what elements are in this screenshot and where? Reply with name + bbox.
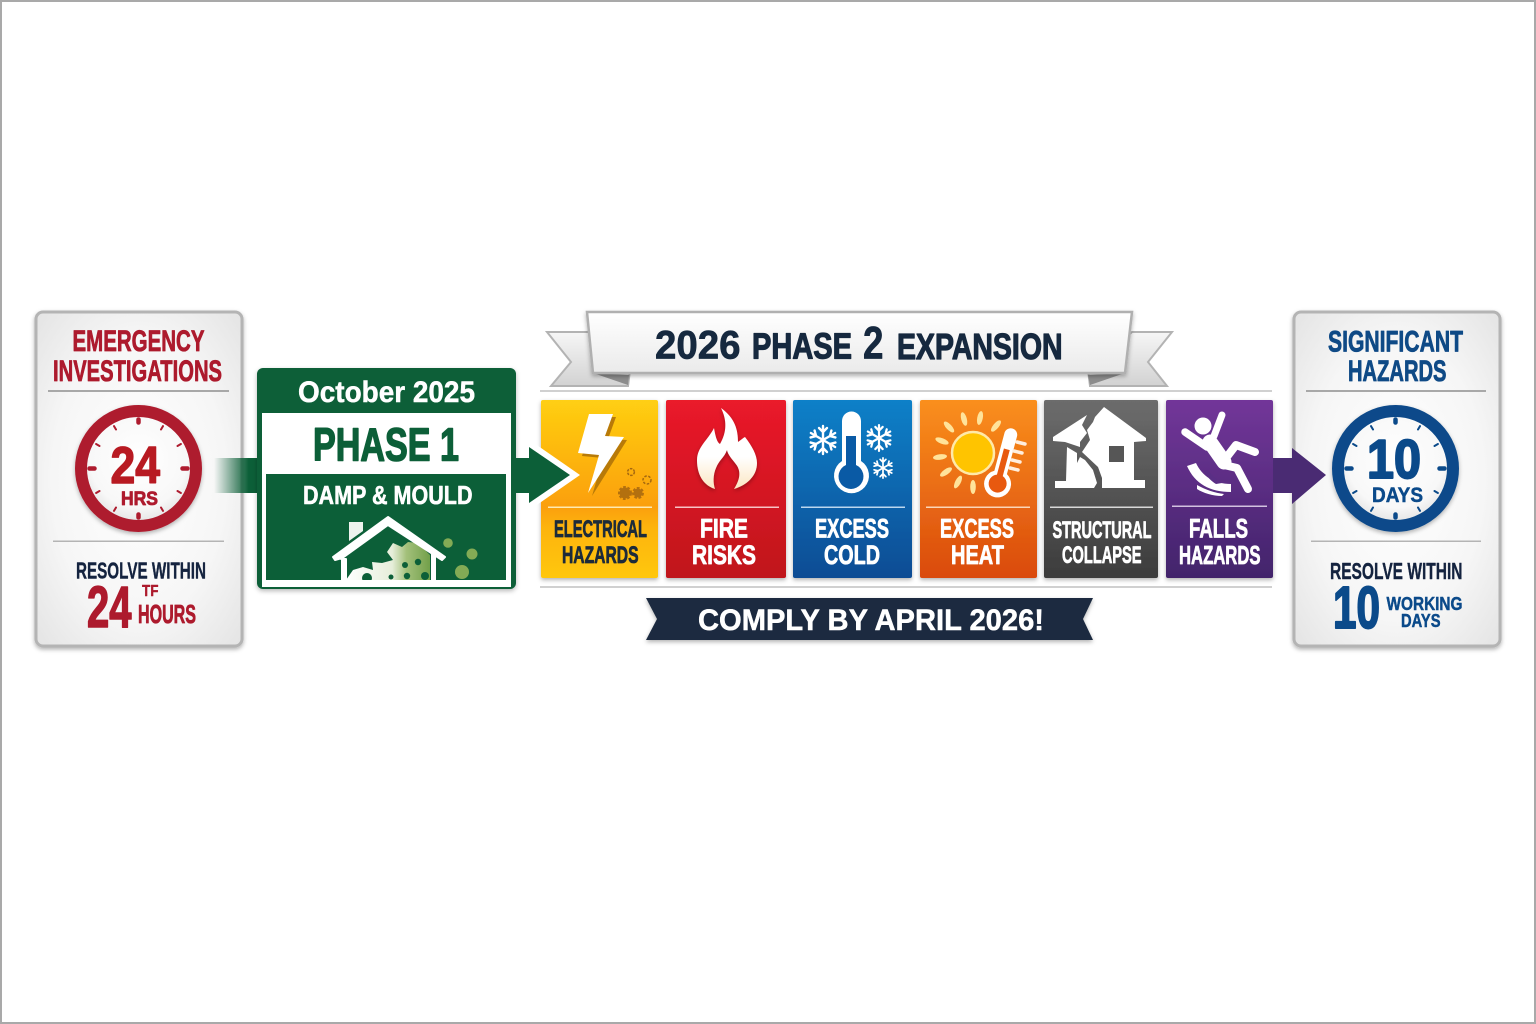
icon: falling person [1185, 415, 1255, 496]
label [692, 514, 756, 570]
icon: 10 days clock: DAYS [1372, 484, 1423, 507]
icon: cracked house [1053, 407, 1146, 488]
label: EXCESS [940, 514, 1014, 544]
text: damp and mould: DAMP & MOULD [303, 480, 472, 510]
label [940, 514, 1014, 570]
label [1179, 514, 1260, 570]
text: October 2025: October 2025 [298, 376, 475, 409]
icon: 24 hours clock [81, 411, 196, 526]
text: resolve within 24 hours [76, 558, 206, 640]
text: resolve within 10 working days: DAYS [1401, 611, 1440, 631]
panel: structural collapse [1044, 400, 1158, 578]
panel: excess cold [793, 400, 912, 578]
panel: significant hazards [1294, 312, 1500, 646]
heading: significant hazards: SIGNIFICANT [1328, 326, 1463, 358]
label: COLD [824, 540, 880, 570]
heading: emergency investigations: INVESTIGATIONS [53, 355, 222, 388]
heading: phase 1: PHASE 1 [313, 418, 459, 470]
callout: comply by april 2026: COMPLY BY APRIL 2026! [698, 604, 1044, 637]
panel: phase 1 damp and mould [257, 368, 516, 589]
heading: significant hazards: HAZARDS [1348, 355, 1446, 388]
banner: 2026 phase 2 expansion [547, 312, 1172, 386]
icon: thermometer with snowflakes [809, 412, 893, 493]
label: STRUCTURAL [1052, 517, 1152, 544]
label: FALLS [1189, 514, 1248, 544]
ribbon tails [547, 332, 1172, 386]
icon: 24 hours clock: HRS [121, 489, 158, 510]
label: EXCESS [815, 514, 889, 544]
label: HEAT [951, 540, 1004, 570]
arrow: emergency card into phase 1 [214, 458, 260, 493]
heading: emergency investigations: EMERGENCY [72, 325, 204, 358]
icon: 10 days clock: 10 [1367, 428, 1421, 490]
icon: flame [697, 408, 757, 489]
icon: house with mould [333, 517, 478, 583]
text: resolve within 24 hours: HOURS [138, 599, 196, 629]
icon: 10 days clock [1338, 411, 1453, 526]
label [815, 514, 889, 570]
text: resolve within 10 working days [1330, 558, 1462, 641]
panel: emergency investigations [36, 312, 242, 646]
arrow: phase 1 to phase 2 [516, 441, 580, 509]
text: resolve within 24 hours: RESOLVE WITHIN [76, 558, 206, 584]
text: resolve within 10 working days: RESOLVE WITHIN [1330, 558, 1462, 584]
heading text: 2026 [655, 324, 740, 368]
panel: excess heat [920, 400, 1037, 578]
icon: mould spots [620, 469, 651, 498]
label: FIRE [700, 514, 748, 544]
callout: comply by april 2026 [646, 598, 1093, 640]
text: resolve within 10 working days: 10 [1333, 575, 1380, 641]
label: RISKS [692, 540, 756, 570]
text: resolve within 24 hours: 24 [87, 575, 132, 640]
label: COLLAPSE [1062, 542, 1142, 569]
icon: sun with thermometer [933, 411, 1025, 500]
icon: 24 hours clock: 24 [110, 437, 160, 495]
arrow: phase 2 to significant hazards [1273, 448, 1326, 504]
heading text: 2 [863, 318, 884, 368]
panel: electrical hazards [541, 400, 658, 578]
label: HAZARDS [1179, 540, 1260, 570]
heading: emergency investigations [53, 325, 222, 388]
text: resolve within 24 hours: TF [142, 583, 159, 600]
heading text [655, 318, 1062, 368]
heading text: EXPANSION [897, 326, 1062, 367]
icon: lightning bolt [578, 414, 627, 496]
panel: falls hazards [1166, 400, 1273, 578]
label: HAZARDS [562, 542, 638, 569]
text: resolve within 10 working days: WORKING [1386, 593, 1462, 614]
label [554, 516, 647, 569]
label [1052, 517, 1152, 569]
heading: significant hazards [1328, 326, 1463, 388]
label: ELECTRICAL [554, 516, 647, 543]
heading text: PHASE [752, 326, 852, 366]
panel: fire risks [666, 400, 786, 578]
